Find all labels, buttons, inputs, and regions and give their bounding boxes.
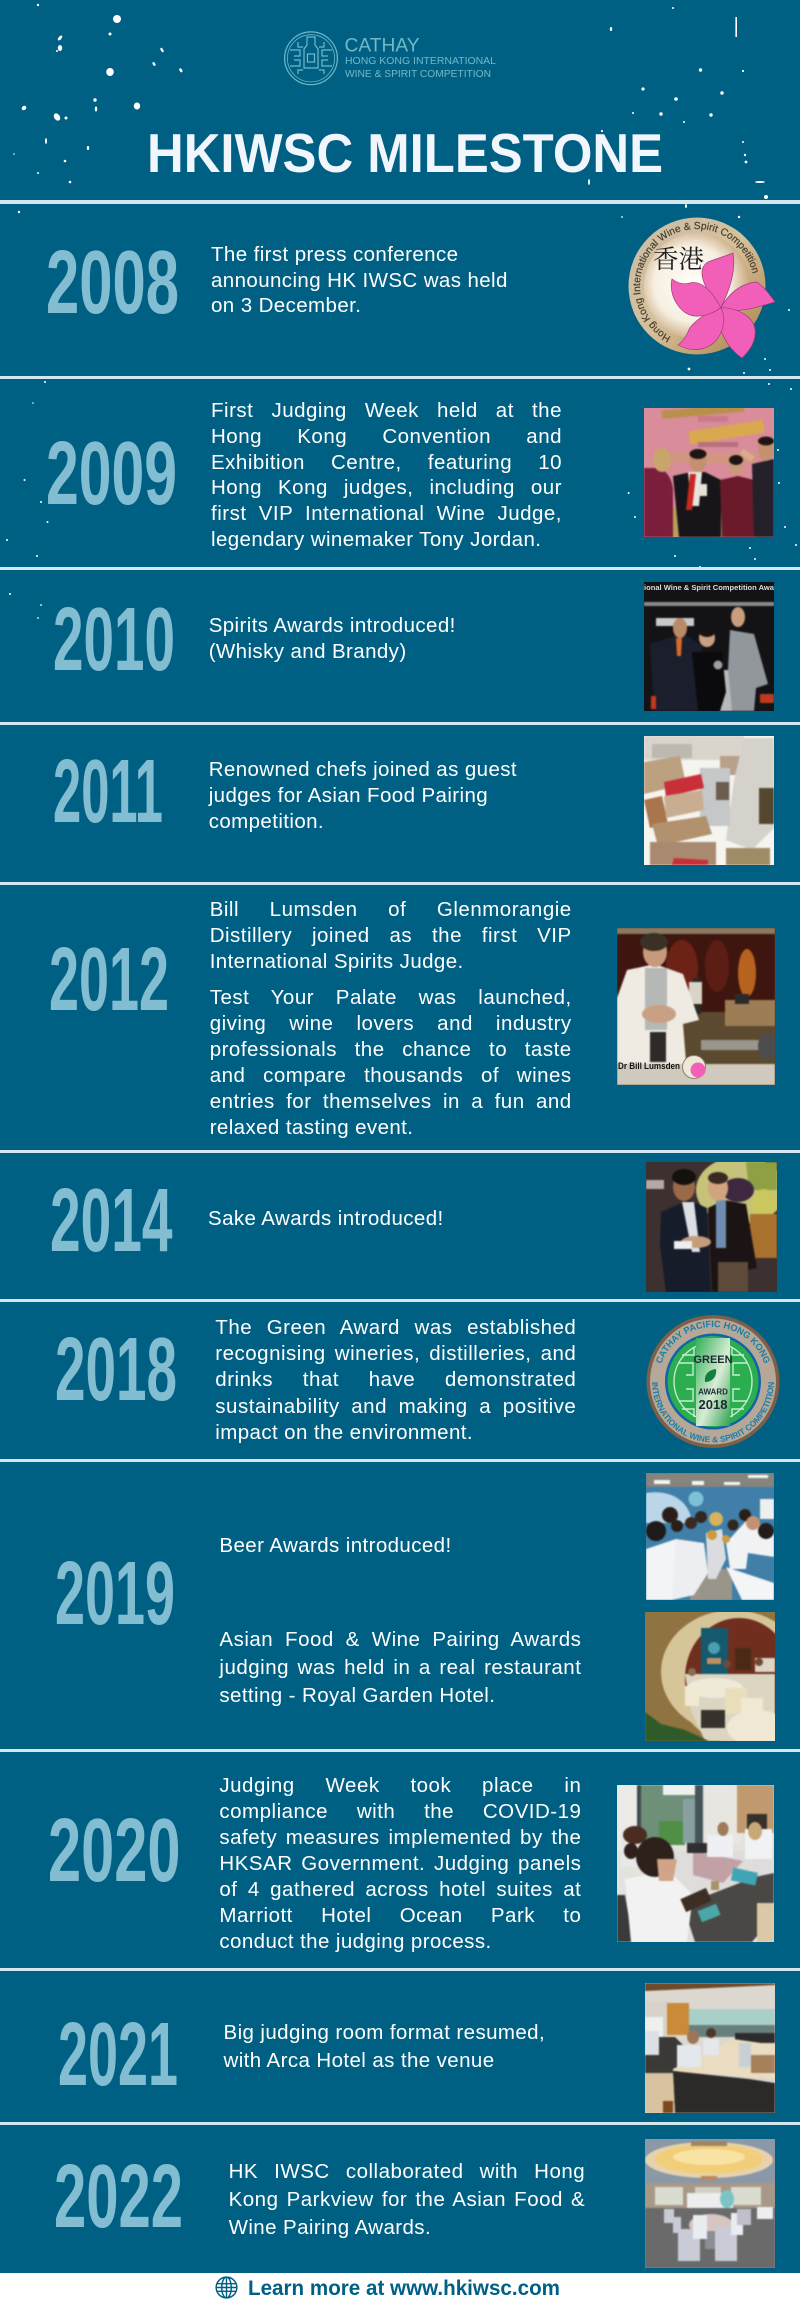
icon: Green Award 2018 medal: CATHAY PACIFIC HONG KONG	[656, 1320, 770, 1364]
panel: 2008	[46, 218, 776, 358]
photo: Sake award handshake	[646, 1162, 777, 1292]
photo: big judging room at Arca Hotel	[645, 1983, 775, 2113]
photo: COVID-safe judging in hotel suite	[617, 1785, 774, 1942]
panel: 2012	[48, 898, 775, 1139]
icon: Hong Kong IWSC medal with bauhinia: 香港	[653, 240, 704, 276]
panel: 2010	[52, 582, 774, 711]
panel: 2011	[52, 736, 774, 865]
text: 2012 Test Your Palate	[210, 986, 572, 1139]
text: 2020 milestone: safety measures implemented by the	[219, 1826, 581, 1849]
text: 2021 milestone: with Arca Hotel as the venue	[224, 2049, 495, 2072]
text: Asian Food and Wine Pairing: Asian Food & Wine Pairing Awards	[219, 1628, 581, 1651]
photo: Dr Bill Lumsden: Dr Bill Lumsden	[618, 1061, 680, 1072]
text: 2008 milestone: The first press conference	[211, 243, 458, 266]
icon: globe	[215, 2276, 238, 2299]
text: 2012 Test Your Palate: giving wine lovers and industry	[210, 1012, 572, 1035]
icon: Green Award 2018 medal: AWARD	[698, 1388, 728, 1397]
text: 2018 milestone: drinks that have demonstrated	[215, 1368, 576, 1391]
year 2018: 2018	[55, 1320, 177, 1420]
text: 2008 milestone	[211, 243, 508, 317]
icon: badge with bauhinia	[682, 1056, 706, 1078]
icon: Green Award 2018 medal: INTERNATIONAL WINE & SPIRIT COMPETITION	[652, 1382, 774, 1442]
panel: 2019	[55, 1473, 775, 1741]
text: 2020 milestone: HKSAR Government. Judging panels	[219, 1852, 581, 1875]
text: 2011 milestone: competition.	[209, 810, 324, 833]
text: 2022 milestone	[229, 2158, 585, 2242]
text: 2021 milestone	[224, 2019, 552, 2075]
text: 2009 milestone: Hong Kong judges, including our	[211, 476, 562, 499]
icon: Green Award 2018 medal: 2018	[699, 1397, 727, 1412]
year 2010: 2010	[52, 590, 174, 690]
photo: Spirits award presentation	[644, 582, 774, 711]
text: 2018 milestone: recognising wineries, distilleries, and	[215, 1342, 576, 1365]
text: 2011 milestone: Renowned chefs joined as guest	[209, 758, 517, 781]
text: 2020 milestone: conduct the judging process.	[219, 1930, 492, 1953]
panel: 2018	[55, 1315, 780, 1448]
text: Beer Awards: Beer Awards introduced!	[219, 1534, 452, 1557]
text: 2012 Test Your Palate: and compare thousands of wines	[210, 1064, 572, 1087]
text: 2020 milestone: Marriott Hotel Ocean Park to	[219, 1904, 581, 1927]
text: 2018 milestone: impact on the environment.	[215, 1421, 473, 1444]
text: 2009 milestone: Hong Kong Convention and	[211, 425, 562, 448]
panel: 2009	[46, 399, 774, 551]
logo wordmark: WINE & SPIRIT COMPETITION	[345, 69, 491, 80]
text: 2008 milestone: on 3 December.	[211, 294, 361, 317]
text: 2011 milestone	[208, 758, 517, 833]
footer link text: Learn more at www.hkiwsc.com	[248, 2277, 560, 2300]
text: 2018 milestone: sustainability and making a positive	[215, 1395, 576, 1418]
text: 2012 Test Your Palate: relaxed tasting event.	[210, 1116, 413, 1139]
photo: restaurant judging through moon gate	[645, 1612, 775, 1741]
year 2019: 2019	[55, 1544, 175, 1644]
icon: Green Award 2018 medal	[646, 1315, 780, 1448]
text: 2022 milestone: Kong Parkview for the Asian Food &	[229, 2188, 585, 2211]
year 2009: 2009	[46, 424, 177, 524]
text: 2012 first VIP spirits judge: Distillery joined as the first VIP	[210, 924, 572, 947]
photo: press clipping collage	[644, 736, 774, 865]
logo wordmark: HONG KONG INTERNATIONAL	[345, 56, 496, 67]
year 2012: 2012	[48, 930, 169, 1030]
text: 2012 first VIP spirits judge	[210, 898, 572, 973]
panel: 2022	[0, 2125, 800, 2273]
text: 2022 milestone: Wine Pairing Awards.	[229, 2216, 431, 2239]
text: 2020 milestone	[219, 1773, 581, 1955]
text: 2012 Test Your Palate: entries for themselves in a fun and	[210, 1090, 572, 1113]
text: 2012 first VIP spirits judge: Bill Lumsden of Glenmorangie	[210, 898, 572, 921]
text: 2012 Test Your Palate: professionals the chance to taste	[210, 1038, 572, 1061]
text: Asian Food and Wine Pairing: judging was held in a real restaurant	[219, 1656, 581, 1679]
text: 2012 first VIP spirits judge: International Spirits Judge.	[210, 950, 464, 973]
icon: round bottle emblem	[285, 32, 337, 85]
text: 2020 milestone: of 4 gathered across hotel suites at	[219, 1878, 581, 1901]
text: 2014 milestone: Sake Awards introduced!	[208, 1207, 444, 1230]
photo: Parkview banquet with chandelier	[645, 2139, 775, 2268]
icon: Green Award 2018 medal: GREEN	[693, 1354, 733, 1366]
text: Asian Food and Wine Pairing: setting - Royal Garden Hotel.	[219, 1684, 495, 1707]
year 2011: 2011	[52, 742, 162, 842]
icon: Hong Kong IWSC medal with bauhinia: Hong Kong International Wine & Spirit Competition	[633, 222, 758, 343]
text: 2009 milestone: first VIP International Wine Judge,	[211, 502, 562, 525]
text: 2011 milestone: judges for Asian Food Pairing	[209, 784, 488, 807]
year 2014: 2014	[50, 1171, 173, 1271]
logo wordmark	[344, 36, 496, 80]
title: HKIWSC MILESTONE	[147, 122, 663, 184]
bauhinia flower	[671, 253, 775, 358]
photo: French Night toast	[644, 408, 774, 537]
text: 2021 milestone: Big judging room format resumed,	[224, 2021, 545, 2044]
text: 2009 milestone: legendary winemaker Tony Jordan.	[211, 528, 541, 551]
background speckles	[6, 4, 797, 619]
year 2020: 2020	[48, 1801, 180, 1901]
year 2022: 2022	[54, 2147, 183, 2247]
text: 2010 milestone	[209, 614, 456, 663]
logo: Cathay Hong Kong International Wine & Spirit Competition	[284, 31, 496, 86]
text: 2010 milestone: Spirits Awards introduced!	[209, 614, 456, 637]
text: 2018 milestone	[215, 1316, 576, 1444]
text: Asian Food and Wine Pairing	[218, 1628, 581, 1707]
text: 2020 milestone: compliance with the COVID-19	[219, 1800, 581, 1823]
text: 2020 milestone: Judging Week took place in	[219, 1774, 581, 1797]
photo: Spirits award presentation: ional Wine & Spirit Competition Awa	[644, 583, 774, 592]
logo wordmark: CATHAY	[344, 36, 420, 57]
text: 2008 milestone: announcing HK IWSC was held	[211, 269, 508, 292]
text: 2018 milestone: The Green Award was established	[215, 1316, 576, 1339]
year 2008: 2008	[46, 233, 179, 333]
text: 2009 milestone: Exhibition Centre, featuring 10	[211, 450, 562, 474]
text: 2010 milestone: (Whisky and Brandy)	[209, 640, 407, 663]
text: 2022 milestone: HK IWSC collaborated with Hong	[229, 2160, 585, 2183]
footer	[0, 2273, 800, 2300]
panel: 2014	[50, 1162, 777, 1292]
panel: 2021	[0, 1971, 800, 2123]
panel: 2020	[48, 1774, 774, 1953]
text: 2009 milestone	[211, 399, 562, 551]
photo: beer judges toasting	[646, 1473, 774, 1600]
text: 2009 milestone: First Judging Week held at the	[211, 399, 562, 422]
text: 2012 Test Your Palate: Test Your Palate was launched,	[210, 986, 572, 1009]
photo: Dr Bill Lumsden	[617, 928, 775, 1085]
year 2021: 2021	[58, 2005, 178, 2105]
